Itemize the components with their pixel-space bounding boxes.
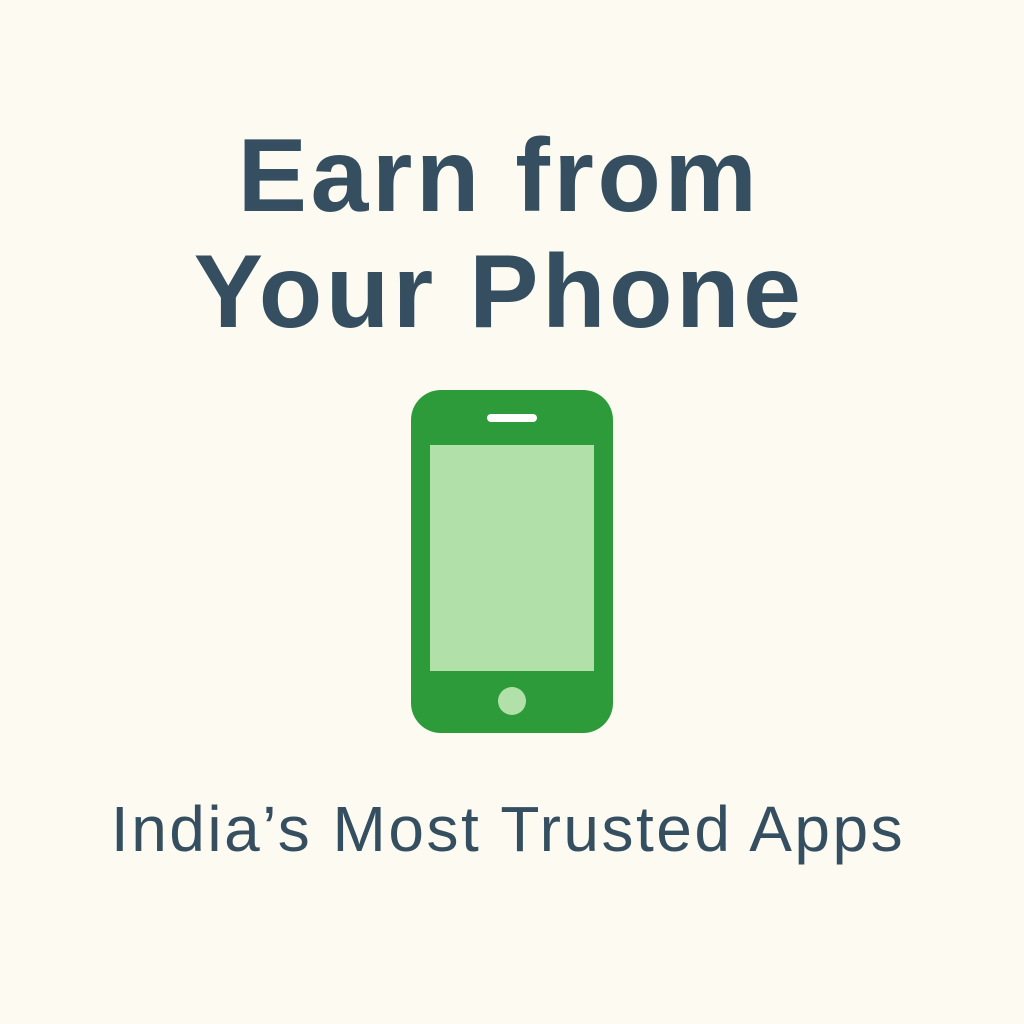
title: Earn from <box>238 118 760 234</box>
title: Your Phone <box>194 234 804 350</box>
title <box>194 118 804 350</box>
subtitle: India’s Most Trusted Apps <box>111 793 905 865</box>
icon: phone <box>411 390 613 733</box>
